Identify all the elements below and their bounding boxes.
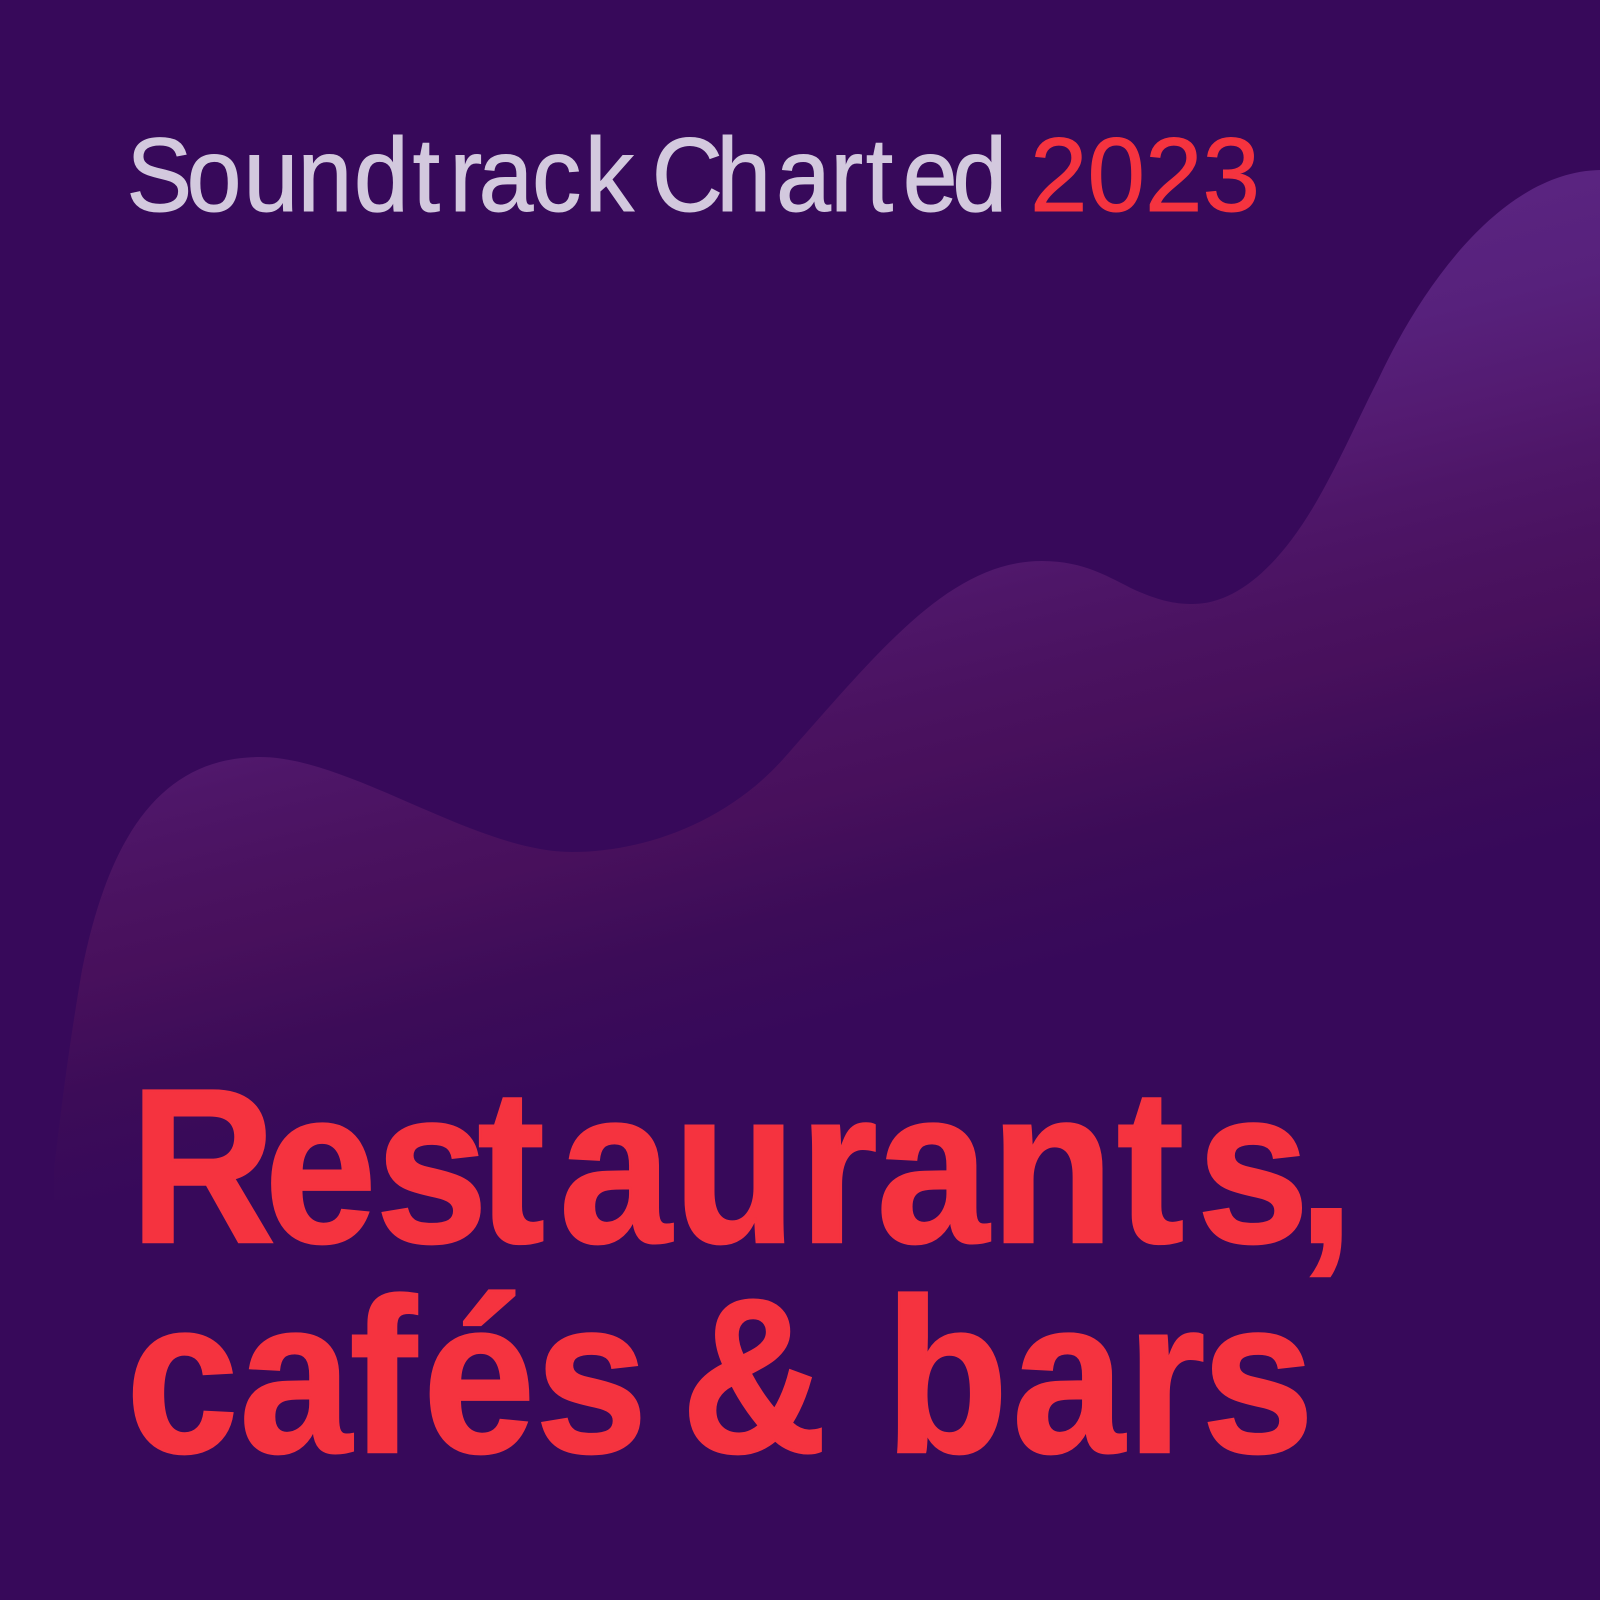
header: Soundtrack Charted 2023 [126,116,1260,234]
header year: 2023 [1030,117,1260,234]
main title [126,1043,1354,1499]
title line 2: cafés & bars [126,1253,1314,1499]
title line 1: Restaurants, [130,1043,1354,1289]
header label: Soundtrack Charted [126,116,1007,234]
wave chart shape [54,170,1600,1200]
